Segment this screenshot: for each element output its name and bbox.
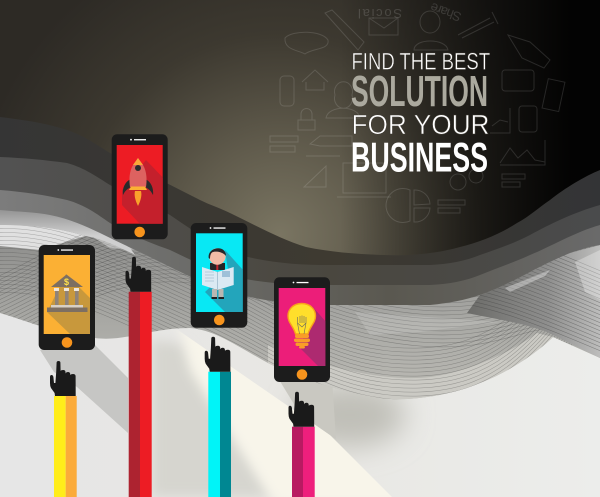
phone: light bulb on pink screen bbox=[274, 277, 330, 382]
doodle: second person bbox=[326, 82, 360, 118]
headline line: business: BUSINESS bbox=[351, 134, 488, 181]
doodle: goggles bbox=[285, 32, 328, 54]
doodle: small phone bbox=[519, 106, 537, 132]
doodle: book bbox=[542, 79, 565, 112]
doodle: house bbox=[302, 70, 328, 90]
headline line: solution: SOLUTION bbox=[351, 67, 488, 116]
phone: bank on yellow screen bbox=[39, 245, 95, 350]
doodle: line chart bbox=[500, 140, 545, 165]
headline bbox=[351, 48, 490, 181]
icon shadow: reader bbox=[205, 250, 243, 312]
background: pale grey fold under the dark waves bbox=[0, 205, 135, 255]
mesh: pale lined strip at far left bbox=[0, 222, 85, 250]
doodle: pencil right bbox=[508, 35, 550, 68]
doodle: social and share labels bbox=[358, 0, 463, 25]
icon shadow: rocket bbox=[122, 160, 163, 224]
doodle: laptop bbox=[337, 163, 391, 197]
doodle: person bbox=[414, 11, 448, 50]
arm and hand: yellow bbox=[50, 361, 77, 497]
phone: newspaper reader on cyan screen bbox=[191, 223, 247, 328]
doodle: speech note bbox=[280, 76, 294, 106]
doodle icons behind the headline bbox=[270, 0, 565, 223]
doodle: pie chart bbox=[386, 188, 430, 223]
doodle: triangle chart bbox=[304, 166, 326, 187]
icon: light bulb bbox=[288, 304, 316, 348]
arm and hand: cyan bbox=[205, 337, 231, 497]
doodle: gears bbox=[450, 174, 466, 190]
background: long shadows and light streaks on floor bbox=[40, 334, 414, 497]
background: dark brown top panel bbox=[0, 0, 600, 280]
icon: bank: $ bbox=[64, 277, 69, 287]
icon: rocket bbox=[123, 158, 153, 206]
arm and hand: red bbox=[126, 257, 152, 497]
doodle: lists bbox=[270, 136, 525, 213]
doodle: social and share labels: Share bbox=[428, 0, 463, 25]
icon shadow: bank bbox=[47, 274, 90, 334]
icon shadow: bulb bbox=[296, 306, 326, 366]
doodle: arrow tags bbox=[306, 136, 352, 156]
background: layered dark waves bbox=[0, 0, 600, 305]
headline line: for your: FOR YOUR bbox=[352, 109, 490, 140]
doodle: wrench bbox=[458, 12, 498, 38]
mesh: right ribbon bbox=[467, 245, 600, 358]
icon: man reading newspaper bbox=[202, 248, 234, 299]
mesh: pale rim of the swoop bbox=[268, 333, 553, 399]
mesh: light highlights bbox=[70, 222, 135, 250]
doodle: tablet bbox=[502, 70, 534, 91]
background: woven line mesh bbox=[0, 226, 600, 400]
doodle: pencil bbox=[325, 10, 364, 50]
doodle: mid chart bbox=[490, 108, 510, 133]
phone: rocket on red screen bbox=[112, 134, 170, 239]
doodle: lock bbox=[298, 109, 315, 130]
headline line: find the best: FIND THE BEST bbox=[352, 48, 490, 75]
doodle: envelope bbox=[369, 18, 398, 35]
doodle: social and share labels: Social bbox=[358, 6, 402, 21]
arm and hand: pink bbox=[288, 392, 315, 497]
